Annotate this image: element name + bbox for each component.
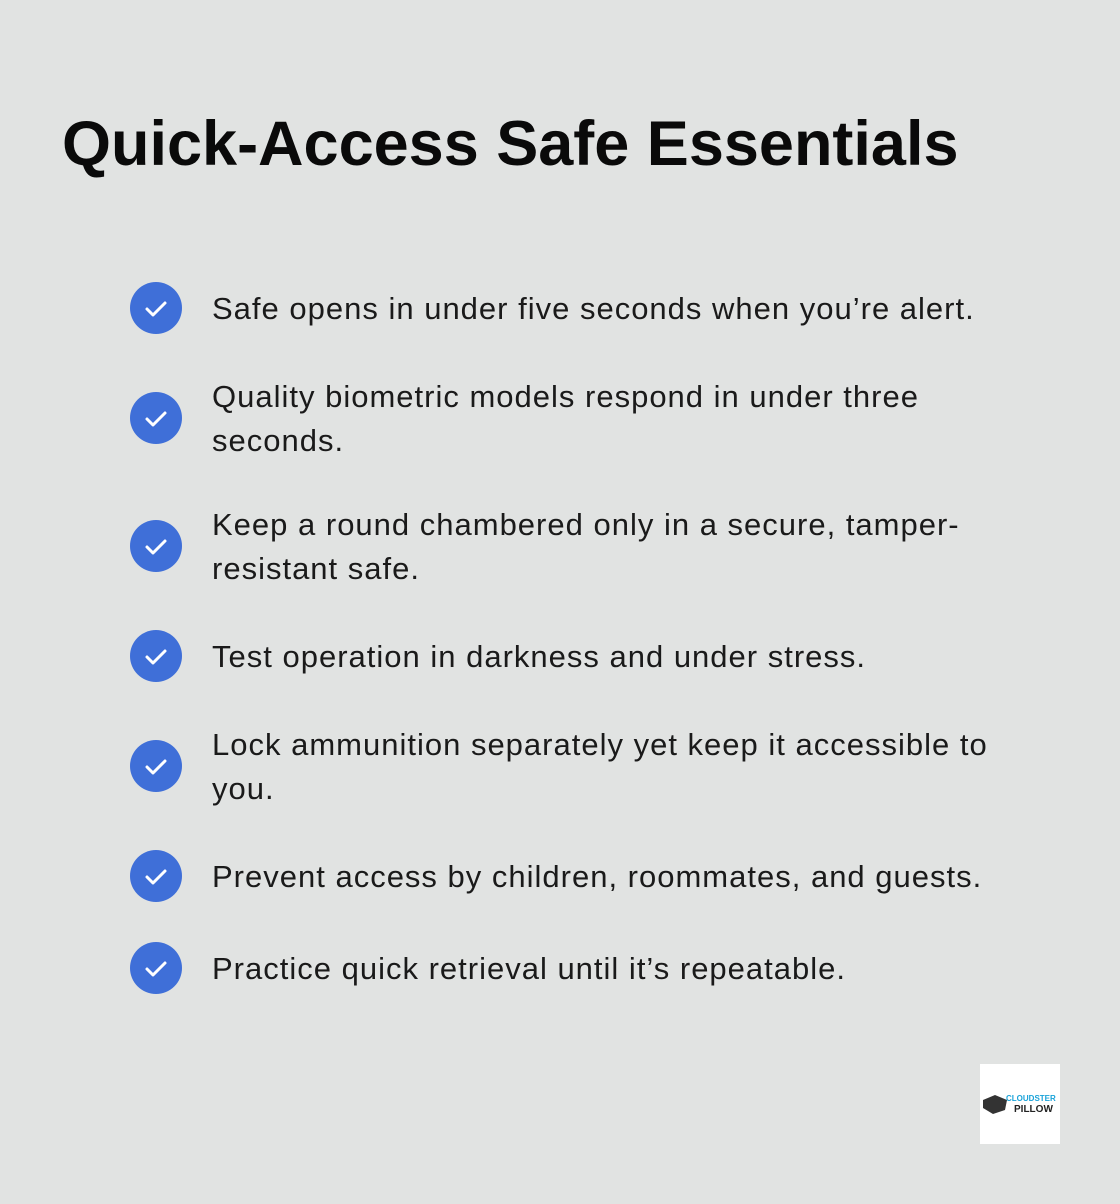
item 4: Test operation in darkness and under stress. bbox=[212, 639, 866, 674]
logo bbox=[980, 1064, 1060, 1144]
item 2: seconds. bbox=[212, 423, 344, 458]
title: Quick-Access Safe Essentials bbox=[62, 109, 958, 179]
item 5: Lock ammunition separately yet keep it accessible to bbox=[212, 727, 988, 762]
item 3: resistant safe. bbox=[212, 551, 420, 586]
item 2: Quality biometric models respond in under three bbox=[212, 379, 919, 414]
item 2 bbox=[130, 379, 919, 458]
icon: check bbox=[130, 740, 182, 792]
icon: check bbox=[130, 282, 182, 334]
icon: check bbox=[130, 850, 182, 902]
item 1: Safe opens in under five seconds when you’re alert. bbox=[212, 291, 975, 326]
item 6: Prevent access by children, roommates, and guests. bbox=[212, 859, 982, 894]
icon: check bbox=[130, 942, 182, 994]
item 5: you. bbox=[212, 771, 275, 806]
logo: PILLOW bbox=[1014, 1104, 1053, 1115]
item 3: Keep a round chambered only in a secure, tamper- bbox=[212, 507, 960, 542]
item 4 bbox=[130, 630, 866, 682]
item 7: Practice quick retrieval until it’s repeatable. bbox=[212, 951, 846, 986]
item 5 bbox=[130, 727, 988, 806]
icon: check bbox=[130, 392, 182, 444]
item 1 bbox=[130, 282, 975, 334]
item 3 bbox=[130, 507, 960, 586]
icon: check bbox=[130, 630, 182, 682]
item 7 bbox=[130, 942, 846, 994]
icon: check bbox=[130, 520, 182, 572]
logo: CLOUDSTER bbox=[1006, 1094, 1056, 1103]
item 6 bbox=[130, 850, 982, 902]
